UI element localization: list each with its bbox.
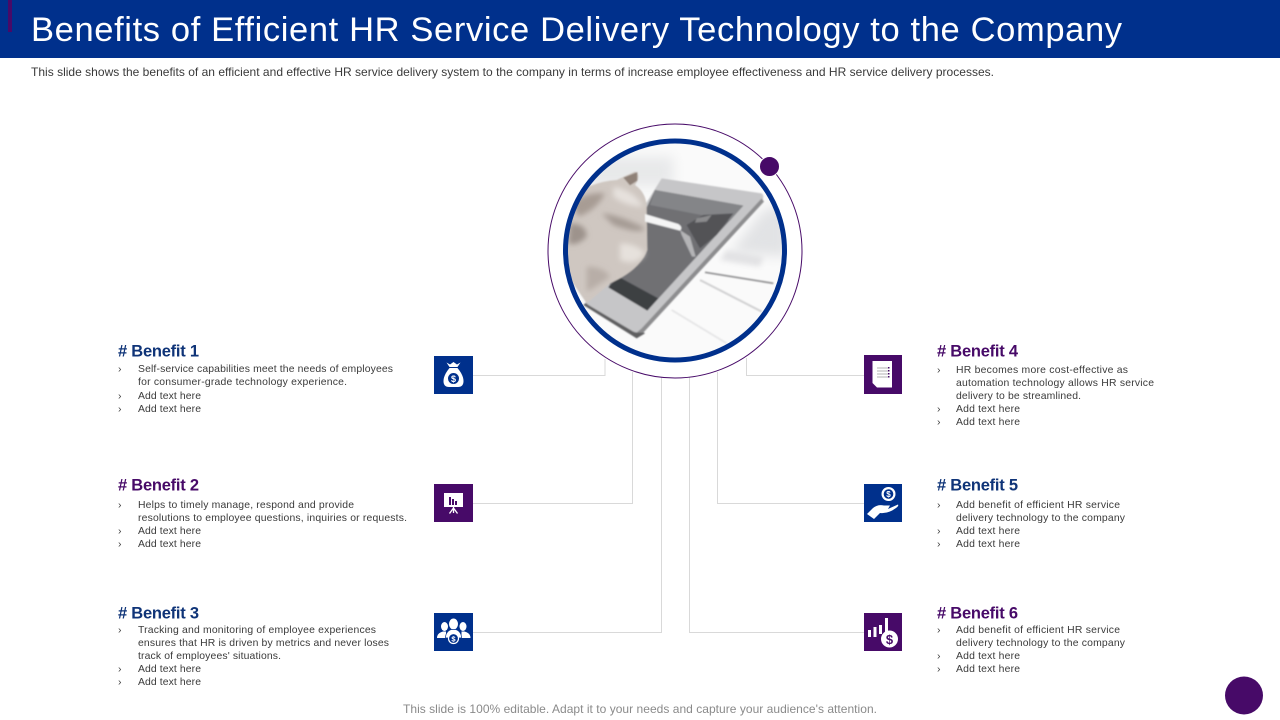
- heading: benefit 2: # Benefit 2: [118, 476, 199, 494]
- bullet list: benefit 3: ›: [118, 676, 122, 688]
- bullet list: benefit 6: [937, 624, 1126, 675]
- icon: group of people: [434, 613, 473, 651]
- photo: hand using stylus on tablet: [568, 152, 782, 344]
- bullet list: benefit 3: [118, 624, 389, 688]
- bullet list: benefit 1: Self-service capabilities meet the needs of employees: [138, 364, 393, 375]
- connector lines: [473, 358, 864, 632]
- bullet list: benefit 1: Add text here: [138, 391, 201, 402]
- icon: presentation board: [434, 484, 473, 522]
- icon: money bag: $: [451, 374, 456, 384]
- bullet list: benefit 2: Helps to timely manage, respond and provide: [138, 500, 354, 511]
- bullet list: benefit 3: Tracking and monitoring of employee experiences: [138, 625, 376, 636]
- bullet list: benefit 6: Add text here: [956, 651, 1020, 662]
- bullet list: benefit 4: ›: [937, 403, 941, 415]
- icon: document: [864, 355, 902, 394]
- benefit 3 text block: [118, 604, 389, 688]
- bullet list: benefit 4: [937, 364, 1154, 428]
- bullet list: benefit 5: ›: [937, 525, 941, 537]
- bullet list: benefit 6: delivery technology to the company: [956, 638, 1126, 649]
- bullet list: benefit 4: HR becomes more cost-effective as: [956, 365, 1128, 376]
- bullet list: benefit 1: [118, 363, 393, 415]
- title bar: [0, 0, 1280, 58]
- bullet list: benefit 3: Add text here: [138, 664, 201, 675]
- bullet list: benefit 6: ›: [937, 663, 941, 675]
- benefit 6 text block: [937, 604, 1126, 675]
- title: Benefits of Efficient HR Service Delivery Technology to the Company: [31, 11, 1123, 49]
- bullet list: benefit 2: ›: [118, 525, 122, 537]
- bullet list: benefit 4: Add text here: [956, 404, 1020, 415]
- icon: money bag: [434, 356, 473, 394]
- icon: group of people: $: [451, 634, 456, 644]
- bullet list: benefit 3: ›: [118, 663, 122, 675]
- heading: benefit 1: # Benefit 1: [118, 342, 199, 360]
- benefit 4 text block: [937, 342, 1154, 428]
- bullet list: benefit 6: Add text here: [956, 664, 1020, 675]
- central circle with tablet photo: [548, 124, 802, 378]
- heading: benefit 3: # Benefit 3: [118, 604, 199, 622]
- icon: hand holding coin: $: [886, 490, 891, 499]
- bullet list: benefit 5: ›: [937, 499, 941, 511]
- icon: rising bars with coin: $: [886, 632, 894, 647]
- bullet list: benefit 4: ›: [937, 364, 941, 376]
- benefit 5 text block: [937, 476, 1126, 550]
- bullet list: benefit 1: ›: [118, 390, 122, 402]
- bullet list: benefit 5: delivery technology to the company: [956, 513, 1126, 524]
- heading: benefit 6: # Benefit 6: [937, 604, 1018, 622]
- bullet list: benefit 2: [118, 499, 407, 550]
- bullet list: benefit 1: for consumer-grade technology experience.: [138, 377, 347, 388]
- bullet list: benefit 2: Add text here: [138, 526, 201, 537]
- bullet list: benefit 4: delivery to be streamlined.: [956, 391, 1081, 402]
- icon: rising bars with coin: [864, 613, 902, 651]
- bullet list: benefit 2: ›: [118, 499, 122, 511]
- bullet list: benefit 4: Add text here: [956, 417, 1020, 428]
- heading: benefit 5: # Benefit 5: [937, 476, 1018, 494]
- bullet list: benefit 5: Add benefit of efficient HR service: [956, 500, 1120, 511]
- bullet list: benefit 5: Add text here: [956, 539, 1020, 550]
- bullet list: benefit 3: Add text here: [138, 677, 201, 688]
- bullet list: benefit 5: ›: [937, 538, 941, 550]
- bullet list: benefit 2: ›: [118, 538, 122, 550]
- subtitle text: This slide shows the benefits of an efficient and effective HR service delivery system to the company in terms of increase employee effectiveness and HR service delivery processes.: [31, 65, 994, 79]
- bullet list: benefit 1: ›: [118, 363, 122, 375]
- bullet list: benefit 2: resolutions to employee questions, inquiries or requests.: [138, 513, 407, 524]
- footer note: This slide is 100% editable. Adapt it to your needs and capture your audience's attention.: [403, 702, 877, 716]
- corner dot: [1225, 676, 1263, 714]
- bullet list: benefit 4: ›: [937, 416, 941, 428]
- bullet list: benefit 1: ›: [118, 403, 122, 415]
- bullet list: benefit 6: ›: [937, 650, 941, 662]
- bullet list: benefit 5: [937, 499, 1126, 550]
- bullet list: benefit 3: ›: [118, 624, 122, 636]
- bullet list: benefit 2: Add text here: [138, 539, 201, 550]
- bullet list: benefit 3: track of employees' situations.: [138, 651, 281, 662]
- benefit 2 text block: [118, 476, 407, 550]
- accent dot: [760, 156, 780, 176]
- icon: hand holding coin: [864, 484, 902, 522]
- bullet list: benefit 1: Add text here: [138, 404, 201, 415]
- benefit 1 text block: [118, 342, 393, 415]
- bullet list: benefit 4: automation technology allows HR service: [956, 378, 1154, 389]
- heading: benefit 4: # Benefit 4: [937, 342, 1019, 360]
- bullet list: benefit 3: ensures that HR is driven by metrics and never loses: [138, 638, 389, 649]
- bullet list: benefit 6: ›: [937, 624, 941, 636]
- bullet list: benefit 6: Add benefit of efficient HR service: [956, 625, 1120, 636]
- bullet list: benefit 5: Add text here: [956, 526, 1020, 537]
